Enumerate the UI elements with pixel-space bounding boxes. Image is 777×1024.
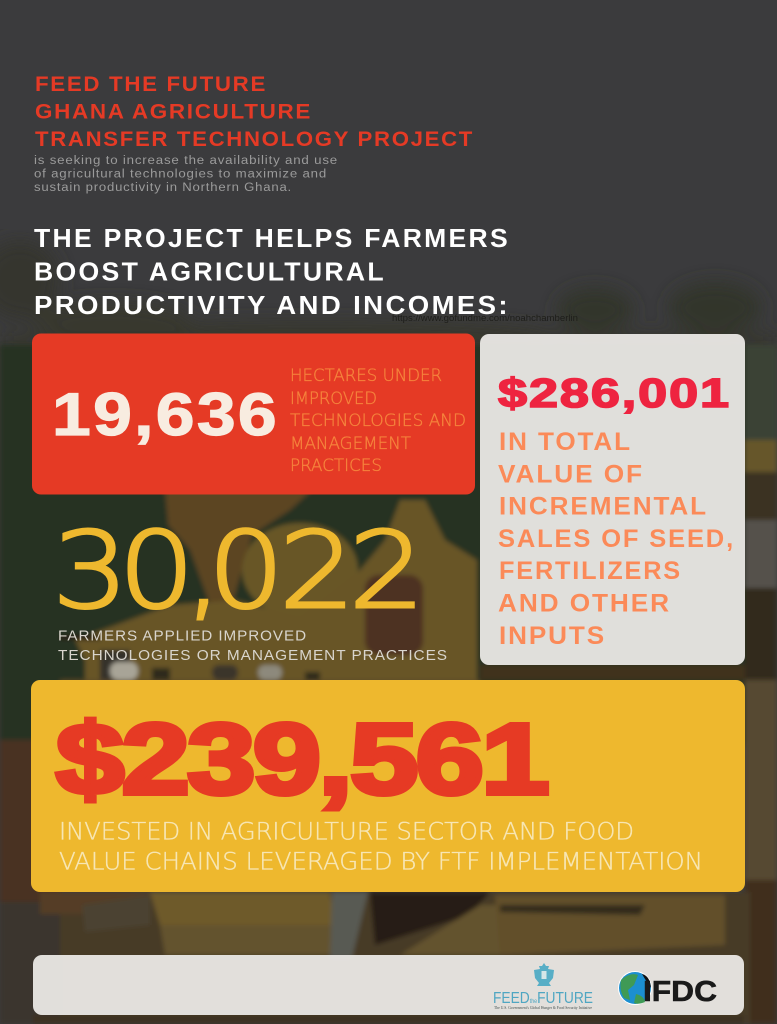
logo: Feed the Future: FEEDtheFUTURE <box>493 990 593 1007</box>
panel: partner logos <box>33 955 744 1015</box>
stat label: hectares: HECTARES UNDER <box>290 366 442 386</box>
logo: IFDC: IFDC <box>643 976 717 1008</box>
logo: Feed the Future <box>493 963 593 1010</box>
heading: the project helps farmers <box>34 225 510 320</box>
machine base shapes <box>150 892 335 935</box>
title: project name: TRANSFER TECHNOLOGY PROJECT <box>35 127 474 151</box>
stat label: farmers: FARMERS APPLIED IMPROVED <box>58 628 307 644</box>
stat label: hectares <box>290 366 466 476</box>
stat label: hectares: PRACTICES <box>290 456 382 476</box>
stat label: hectares: MANAGEMENT <box>290 434 412 454</box>
stat: farmers applied improved technologies <box>52 509 448 664</box>
title: project name: FEED THE FUTURE <box>35 72 267 96</box>
stat label: sales value: FERTILIZERS <box>499 557 682 585</box>
heading: the project helps farmers: THE PROJECT HELPS FARMERS <box>34 225 510 253</box>
stat label: investment: VALUE CHAINS LEVERAGED BY FTF IMPLEMENTATION <box>59 848 703 876</box>
panel: investment statistic <box>31 680 745 892</box>
stat label: sales value: SALES OF SEED, <box>498 525 735 553</box>
stat label: hectares: TECHNOLOGIES AND <box>290 411 466 431</box>
icon: globe <box>618 971 652 1005</box>
stat label: sales value: INCREMENTAL <box>499 492 708 520</box>
icon: US seal <box>534 963 554 986</box>
stat label: farmers <box>58 628 448 664</box>
stat number: sales value: $286,001 <box>498 370 731 416</box>
heading: the project helps farmers: BOOST AGRICULTURAL <box>34 258 386 286</box>
text block: project purpose: sustain productivity in Northern Ghana. <box>34 182 292 194</box>
logo: IFDC <box>618 971 717 1008</box>
stat number: hectares: 19,636 <box>52 381 279 448</box>
stat label: farmers: TECHNOLOGIES OR MANAGEMENT PRACTICES <box>58 648 448 664</box>
stat label: investment <box>59 818 703 876</box>
logo: Feed the Future: The U.S. Government's Global Hunger & Food Security Initiative <box>494 1005 592 1010</box>
text block: project purpose <box>34 155 338 194</box>
heading: the project helps farmers: PRODUCTIVITY AND INCOMES: <box>34 292 510 320</box>
stat label: sales value: INPUTS <box>499 622 606 650</box>
stat number: investment: $239,561 <box>56 704 547 816</box>
title: project name: GHANA AGRICULTURE <box>35 100 312 124</box>
stat number: farmers: 30,022 <box>52 509 425 632</box>
stray url caption: https://www.gofundme.com/noahchamberlin <box>392 313 578 323</box>
text block: project purpose: of agricultural technologies to maximize and <box>34 168 327 180</box>
stat label: sales value: IN TOTAL <box>499 428 632 456</box>
stat label: investment: INVESTED IN AGRICULTURE SECTOR AND FOOD <box>59 818 634 846</box>
stat label: sales value <box>498 428 735 650</box>
stat label: hectares: IMPROVED <box>290 389 377 409</box>
hopper and drum shapes <box>165 490 312 605</box>
title: project name <box>35 72 474 151</box>
stat label: sales value: AND OTHER <box>498 590 671 618</box>
panel: incremental sales statistic <box>480 334 745 665</box>
text block: project purpose: is seeking to increase the availability and use <box>34 155 338 167</box>
stat label: sales value: VALUE OF <box>498 460 644 488</box>
panel: hectares statistic <box>32 334 475 494</box>
